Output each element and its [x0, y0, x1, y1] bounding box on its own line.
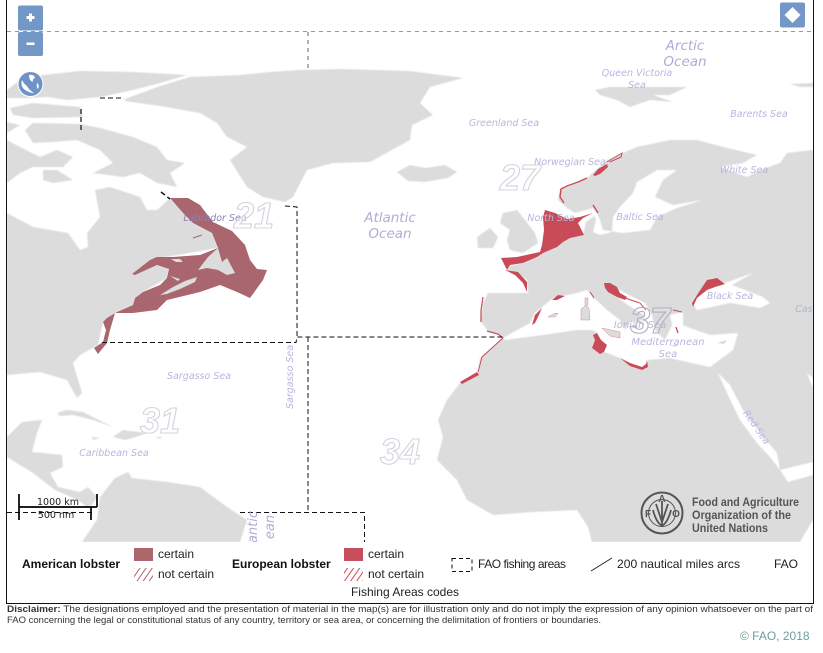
legend panel [7, 542, 813, 603]
label: Atlantic vertical partial: antic [246, 511, 261, 543]
land: Corsica and Sardinia [581, 298, 590, 320]
land: Novaya Zemlya [790, 83, 813, 87]
label: Arctic Ocean: Arctic [666, 38, 704, 54]
boundary: arctic vertical [80, 109, 82, 132]
water: Red Sea [718, 373, 813, 482]
range: Black Sea [692, 278, 725, 307]
sea labels [79, 38, 813, 543]
land: South America [82, 472, 247, 542]
legend: American certain label: certain [158, 547, 194, 561]
logo emblem: A [658, 494, 666, 505]
water: Black Sea [692, 273, 770, 310]
copyright: © FAO, 2018 [740, 629, 810, 643]
European lobster range [460, 153, 725, 384]
legend: European certain label: certain [368, 547, 404, 561]
number 37: 37 [630, 300, 672, 341]
legend: FAO fishing areas swatch [452, 558, 472, 572]
legend: FAO label: FAO [774, 557, 798, 571]
land: Cyprus [717, 340, 727, 344]
range: Adriatic east [625, 298, 646, 310]
range: Libya [620, 358, 648, 370]
boundary: upper vertical [307, 32, 309, 71]
legend: American certain swatch [134, 548, 153, 561]
logo emblem: O [672, 509, 680, 520]
range: north Norway outline [607, 153, 622, 162]
label: Sargasso Sea: Sargasso Sea [167, 371, 231, 382]
Mediterranean islands [548, 298, 727, 347]
water: Persian Gulf [807, 373, 813, 388]
land: Greenland [125, 69, 463, 202]
land: Svalbard [595, 87, 687, 107]
land: Ellesmere Island [7, 71, 187, 100]
label: Atlantic Ocean: Atlantic [364, 210, 416, 226]
land: Crete [668, 345, 678, 347]
legend: FAO fishing areas label: FAO fishing areas [478, 557, 566, 571]
label: Ionian Sea: Ionian Sea [614, 320, 666, 331]
FAO fishing area boundaries [7, 32, 813, 542]
water: Mediterranean Sea [503, 283, 738, 368]
legend: 200 nm arcs label: 200 nautical miles arcs [617, 557, 740, 571]
legend: Fishing Areas codes label: Fishing Areas codes [351, 585, 459, 599]
land: North America mainland [7, 187, 218, 398]
island: Anticosti over range [171, 259, 183, 262]
range: Spanish Mediterranean [532, 308, 542, 325]
land: Iceland [397, 165, 457, 182]
number 27: 27 [499, 157, 542, 198]
range: American lobster certain [94, 198, 267, 354]
logo emblem [642, 492, 682, 534]
island: Prince Edward over range [170, 276, 180, 281]
legend: European lobster heading: European lobster [232, 557, 331, 571]
scale label: nautical miles: 500 nm [38, 510, 74, 521]
label: White Sea: White Sea [720, 165, 768, 176]
range: Aegean [676, 327, 678, 333]
label: Caspian Sea partial: Cas [795, 304, 813, 315]
range: Marmara [673, 310, 682, 312]
scale label: kilometres: 1000 km [37, 497, 79, 508]
range: Adriatic [604, 283, 627, 300]
land masses [7, 69, 813, 542]
land: Devon Island [10, 103, 83, 118]
range: Ligurian [590, 292, 594, 298]
logo text line 2: Organization of the [692, 509, 791, 522]
disclaimer line 2: FAO concerning the legal or constitutional status of any country, territory or sea area, or concerning the delimitation of frontiers or boundaries. [7, 615, 601, 626]
zoom out button [18, 32, 43, 56]
legend: 200 nm arcs swatch [591, 558, 612, 571]
zoom in button [18, 6, 43, 30]
label: Queen Victoria Sea: Queen Victoria [602, 68, 672, 79]
label: Caribbean Sea: Caribbean Sea [79, 448, 149, 459]
land: Cuba [57, 410, 113, 427]
legend: American not certain label: not certain [158, 567, 214, 581]
label: Black Sea: Black Sea [707, 291, 753, 302]
logo text line 1: Food and Agriculture [692, 496, 799, 509]
disclaimer line 1: Disclaimer: The designations employed and the presentation of material in the map(s) are for illustration only and do not imply the expression of any opinion whatsoever on the part of [7, 604, 813, 615]
globe button [18, 71, 44, 97]
label: Norwegian Sea: Norwegian Sea [534, 157, 606, 168]
label: Baltic Sea: Baltic Sea [616, 212, 664, 223]
land: Victoria Island [7, 140, 73, 183]
land: Sicily [602, 328, 620, 338]
number 31: 31 [140, 400, 180, 441]
legend: European not certain swatch [344, 568, 363, 581]
land: Southampton Island [43, 170, 73, 183]
boundary: area 31 east [307, 337, 309, 512]
island: Nova Scotia over range [160, 277, 197, 295]
boundary: Davis Strait [161, 192, 170, 199]
range: Tunisia [592, 333, 607, 354]
boundary: top [7, 30, 813, 32]
land: Ireland [477, 228, 498, 248]
arctic channel between Ellesmere and Greenland [123, 76, 187, 98]
land: Eurasia and Africa [437, 140, 813, 542]
label: North Sea: North Sea [527, 213, 575, 224]
legend: American lobster heading: American lobster [22, 557, 120, 571]
number 34: 34 [380, 431, 420, 472]
estuary mark [193, 235, 202, 238]
legend: American not certain swatch [134, 568, 153, 581]
label: Greenland Sea: Greenland Sea [469, 118, 539, 129]
range: Norway [593, 164, 608, 176]
label: Atlantic Ocean: Ocean [368, 226, 412, 242]
label: Barents Sea: Barents Sea [730, 109, 788, 120]
land: Central America [7, 420, 97, 507]
inland seas [503, 170, 813, 482]
number 21: 21 [233, 195, 274, 236]
legend: European not certain label: not certain [368, 567, 424, 581]
FAO logo [642, 492, 799, 535]
island: Newfoundland over range [198, 248, 235, 275]
range: North Sea and Channel [501, 210, 593, 270]
boundary: area 21 south [102, 337, 503, 342]
range: Morocco south [460, 372, 479, 384]
land: Hispaniola [113, 430, 147, 440]
boundary: area 21 east [285, 206, 297, 337]
label: Mediterranean Sea: Mediterranean [631, 337, 705, 348]
American lobster range [94, 198, 267, 354]
logo text line 3: United Nations [692, 522, 768, 535]
label: Labrador Sea: Labrador Sea [183, 213, 247, 224]
land: Jamaica [91, 437, 100, 440]
land: Balearic Islands [548, 313, 558, 317]
logo emblem: F [645, 509, 651, 520]
range: west Norway coast [560, 178, 587, 203]
land: Baffin Island [25, 123, 185, 187]
boundary: area 31 south [7, 512, 95, 514]
range: Gulf of Cadiz [487, 331, 503, 338]
land: small arctic island [7, 122, 20, 133]
range: Iberia Atlantic [481, 297, 483, 322]
scale bar [19, 494, 97, 521]
land: Great Britain [500, 210, 538, 253]
label: Sargasso Sea vertical: Sargasso Sea [285, 345, 296, 409]
range: Skagerrak [593, 205, 598, 213]
range: Biscay [505, 270, 527, 292]
label: Queen Victoria Sea: Sea [628, 80, 646, 91]
label: Red Sea: Red Sea [740, 408, 772, 447]
boundary: north Baffin [100, 97, 121, 99]
land: Puerto Rico [155, 437, 162, 439]
fullscreen diamond button [780, 2, 805, 28]
range: Gulf of Lion [552, 295, 565, 300]
label: Mediterranean Sea: Sea [659, 349, 677, 360]
water: Baltic Sea [593, 170, 703, 235]
boundary: area 34 south [240, 512, 364, 542]
fishing area numbers [140, 157, 672, 472]
disclaimer [7, 604, 813, 626]
label: Ocean vertical partial: ean [263, 515, 278, 539]
legend: European certain swatch [344, 548, 363, 561]
range: Morocco coast [478, 338, 503, 372]
label: Arctic Ocean: Ocean [663, 54, 707, 70]
